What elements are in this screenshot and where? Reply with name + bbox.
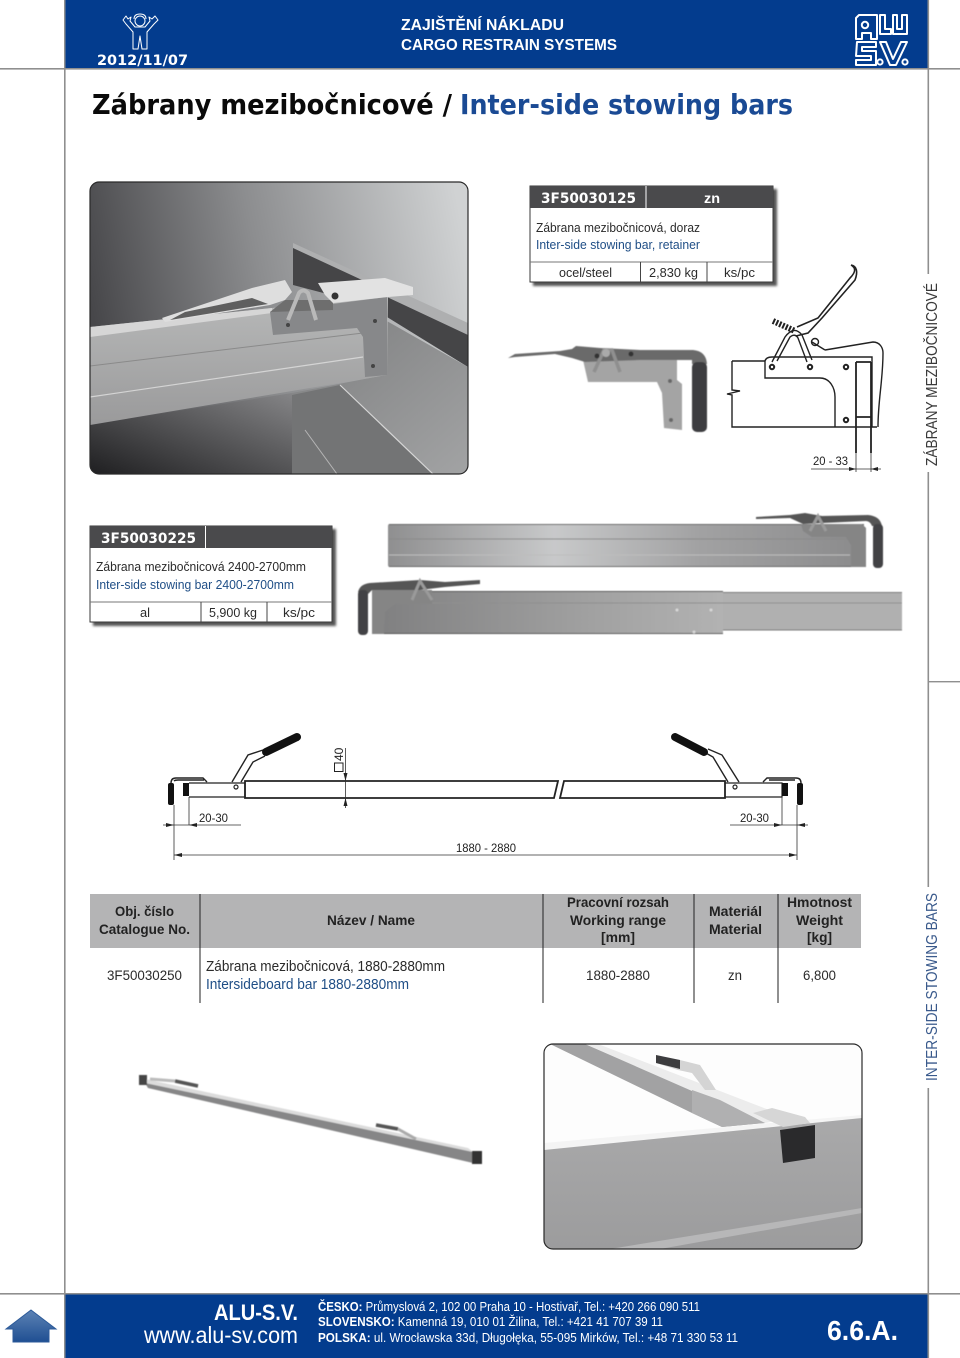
website: www.alu-sv.com <box>143 1322 298 1348</box>
dimension: 40: 40 <box>332 747 346 761</box>
photo: latch mounted on side wall <box>90 182 468 474</box>
technical drawing: retainer section <box>727 265 883 472</box>
dimension: overall length: 1880 - 2880 <box>456 841 516 855</box>
panel: product card 3F50030125: zn <box>704 190 720 206</box>
table headings: Hmotnost <box>787 894 852 910</box>
table headings: Název / Name <box>327 912 415 928</box>
table headings: Obj. číslo <box>115 903 174 919</box>
table row: Intersideboard bar 1880-2880mm <box>206 977 409 993</box>
table headings: Working range <box>570 912 666 928</box>
panel: product card 3F50030225: 5,900 kg <box>209 605 257 620</box>
panel: product card 3F50030125: Zábrana mezibočnicová, doraz <box>536 220 700 235</box>
panel: product card 3F50030225: 3F50030225 <box>101 531 196 547</box>
table row: 6,800 <box>803 967 836 983</box>
dimension: 20-30 left: 20-30 <box>199 811 228 825</box>
table row <box>107 959 836 993</box>
page number: 6.6.A. <box>827 1315 898 1346</box>
photo: retainer part <box>508 346 707 432</box>
photo: complete bar <box>139 1075 482 1164</box>
addresses: SLOVENSKO: Kamenná 19, 010 01 Žilina, Tel.: +421 41 707 39 11 <box>318 1314 663 1329</box>
vertical label: English: INTER-SIDE STOWING BARS <box>924 893 941 1081</box>
title: Zábrany mezibočnicové / <box>92 88 453 121</box>
technical drawing: retainer section: 20 - 33 <box>813 454 848 468</box>
table headings: Catalogue No. <box>99 921 190 937</box>
photo: bar hooked on side wall <box>544 1044 862 1249</box>
dimension: 20-30 right: 20-30 <box>740 811 769 825</box>
panel: product card 3F50030125: 2,830 kg <box>649 265 698 280</box>
spec table <box>90 894 861 1003</box>
addresses <box>318 1299 738 1345</box>
table headings: Materiál <box>709 903 762 919</box>
section title: ZAJIŠTĚNÍ NÁKLADU <box>401 15 564 34</box>
addresses: POLSKA: ul. Wrocławska 33d, Długołęka, 55-095 Mirków, Tel.: +48 71 330 53 11 <box>318 1330 738 1345</box>
footer band <box>66 1294 928 1358</box>
table headings: Weight <box>796 912 843 928</box>
title <box>92 88 793 121</box>
icon: home arrow <box>6 1310 56 1342</box>
date: 2012/11/07 <box>97 53 188 69</box>
left handle <box>168 737 297 805</box>
panel: product card 3F50030225: ks/pc <box>283 605 316 620</box>
table row: 3F50030250 <box>107 967 182 983</box>
table headings: [kg] <box>807 929 832 945</box>
photo: telescopic bar, lower <box>358 580 902 635</box>
addresses: ČESKO: Průmyslová 2, 102 00 Praha 10 - Hostivař, Tel.: +420 266 090 511 <box>318 1299 700 1314</box>
panel: product card 3F50030125: 3F50030125 <box>541 191 636 207</box>
dimension: overall length <box>174 841 797 857</box>
logo: ALU S.V. <box>856 15 908 65</box>
dimension: 40 <box>332 747 348 808</box>
panel: product card 3F50030125: ks/pc <box>724 265 756 280</box>
panel: product card 3F50030125: Inter-side stowing bar, retainer <box>536 237 701 252</box>
panel: product card 3F50030225 <box>90 526 336 626</box>
table headings <box>99 894 852 945</box>
table headings: Material <box>709 921 762 937</box>
photo: telescopic bar, upper <box>388 513 883 568</box>
title: Inter-side stowing bars <box>460 88 793 121</box>
icon: worker mascot <box>123 14 158 49</box>
table headings: Pracovní rozsah <box>567 894 669 910</box>
table headings: [mm] <box>601 929 635 945</box>
right handle <box>675 737 803 805</box>
table row: 1880-2880 <box>586 967 650 983</box>
section title: CARGO RESTRAIN SYSTEMS <box>401 37 617 54</box>
panel: product card 3F50030225: Inter-side stowing bar 2400-2700mm <box>96 577 294 592</box>
tubes <box>245 781 725 798</box>
panel: product card 3F50030125 <box>530 186 777 286</box>
dimension: 20-30 right <box>730 797 808 860</box>
table row: zn <box>728 967 742 983</box>
panel: product card 3F50030125: ocel/steel <box>559 265 612 280</box>
table row: Zábrana mezibočnicová, 1880-2880mm <box>206 959 445 975</box>
company name: ALU-S.V. <box>214 1300 298 1325</box>
section title <box>401 15 617 54</box>
header band <box>66 0 928 69</box>
dimension: 20-30 left <box>163 797 241 860</box>
technical drawing: bar with handles <box>163 737 808 860</box>
vertical label: Czech: ZÁBRANY MEZIBOČNICOVÉ <box>922 283 941 466</box>
panel: product card 3F50030225: Zábrana mezibočnicová 2400-2700mm <box>96 559 306 574</box>
panel: product card 3F50030225: al <box>140 605 150 620</box>
